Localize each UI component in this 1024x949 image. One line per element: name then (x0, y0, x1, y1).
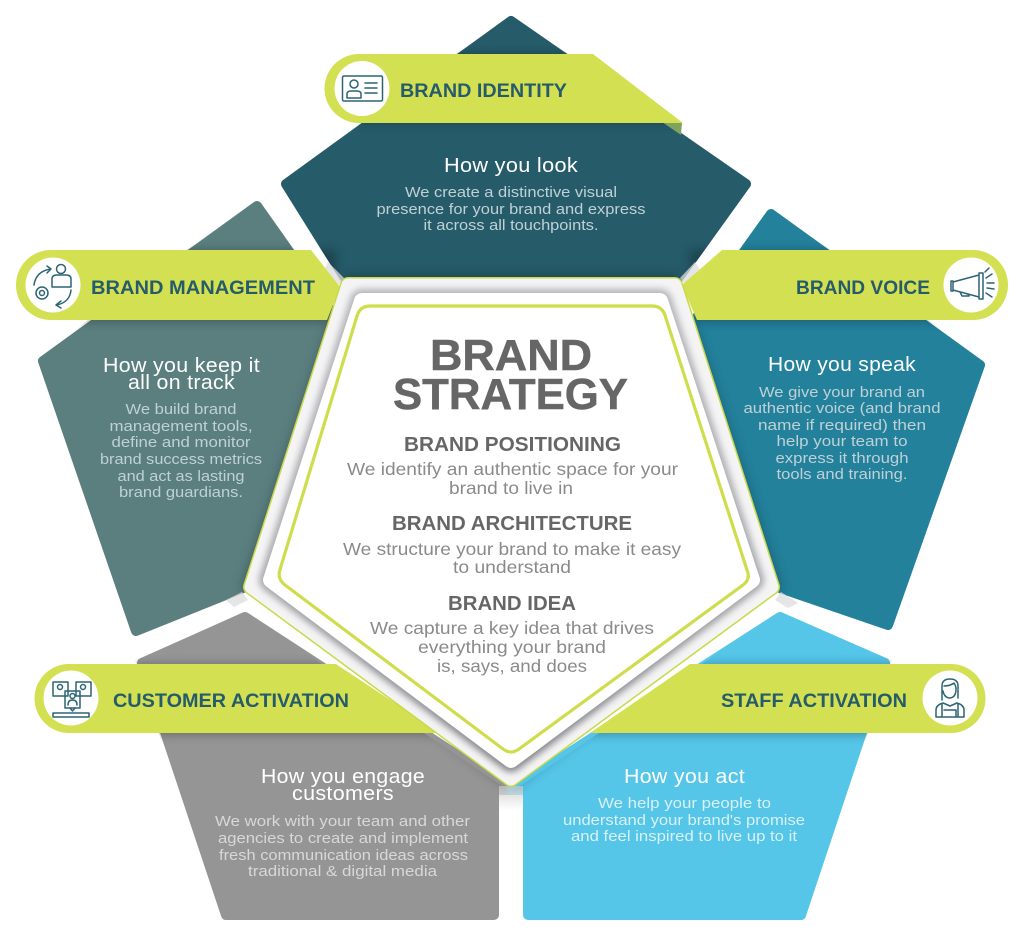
text: brand idea: is, says, and does (437, 656, 587, 676)
text: voice description: We give your brand an (759, 384, 925, 401)
text: brand positioning (347, 434, 678, 498)
text: management description: brand success metrics (100, 451, 262, 468)
text: brand idea: BRAND IDEA (448, 593, 576, 615)
ribbon: customer activation (34, 664, 440, 733)
panel: customer activation (142, 617, 511, 915)
text: voice description: express it through (776, 450, 908, 467)
title: brand strategy: STRATEGY (393, 370, 628, 419)
text: management description (100, 401, 262, 501)
heading: how you keep it all on track: How you keep it (103, 355, 260, 377)
text: voice description: help your team to (776, 433, 908, 450)
text: brand idea (370, 593, 654, 676)
icon: management cycle (26, 258, 80, 312)
label: brand management: BRAND MANAGEMENT (91, 278, 315, 299)
title: brand strategy (393, 331, 628, 419)
ribbon: brand identity (324, 54, 683, 135)
text: voice description (744, 384, 940, 483)
panel: staff activation (511, 617, 885, 915)
inner green outline (279, 306, 748, 752)
text: identity description: it across all touchpoints. (424, 217, 598, 234)
text: brand idea: everything your brand (418, 637, 606, 657)
text: voice description: name if required) then (758, 417, 926, 434)
text: brand architecture (343, 513, 681, 577)
ribbon: brand management (16, 250, 340, 320)
text: staff description: and feel inspired to live up to it (571, 828, 798, 845)
label: staff activation: STAFF ACTIVATION (721, 691, 907, 712)
text: identity description (376, 184, 646, 234)
text: management description: define and monitor (112, 434, 251, 451)
panel: brand strategy centre (251, 285, 772, 779)
heading: how you engage customers: customers (292, 783, 394, 805)
label: customer activation: CUSTOMER ACTIVATION (113, 691, 349, 712)
panel: brand identity (286, 21, 746, 280)
text: staff description: understand your brand's promise (563, 812, 805, 829)
heading: how you act: How you act (624, 766, 745, 788)
heading: how you keep it all on track (103, 355, 260, 394)
panel: brand management (43, 206, 334, 631)
text: staff description (563, 795, 805, 845)
icon: staff person (922, 670, 978, 726)
text: brand positioning: BRAND POSITIONING (404, 434, 621, 456)
text: brand positioning: brand to live in (449, 478, 573, 498)
text: customer description (215, 813, 470, 880)
text: brand architecture: to understand (453, 557, 571, 577)
label: brand identity: BRAND IDENTITY (400, 81, 567, 102)
text: brand architecture: BRAND ARCHITECTURE (392, 513, 632, 535)
heading: how you speak: How you speak (768, 354, 917, 376)
text: management description: We build brand (126, 401, 236, 418)
text: customer description: We work with your team and other (215, 813, 470, 830)
text: customer description: traditional & digital media (248, 863, 438, 880)
text: management description: and act as lasting (118, 468, 244, 485)
text: staff description: We help your people to (598, 795, 771, 812)
text: brand architecture: We structure your brand to make it easy (343, 539, 681, 559)
text: identity description: presence for your brand and express (376, 201, 646, 218)
icon: customer panels (44, 670, 98, 726)
ribbon: brand voice (682, 250, 1008, 320)
panel: brand voice (695, 214, 980, 625)
icon: megaphone (944, 258, 998, 312)
text: identity description: We create a distinctive visual (405, 184, 617, 201)
text: voice description: tools and training. (776, 466, 908, 483)
text: brand positioning: We identify an authentic space for your (347, 459, 678, 479)
title: brand strategy: BRAND (430, 331, 592, 380)
text: management description: brand guardians. (119, 484, 243, 501)
text: customer description: agencies to create and implement (218, 830, 469, 847)
text: brand idea: We capture a key idea that drives (370, 618, 654, 638)
heading: how you look: How you look (444, 155, 579, 177)
ribbon: staff activation (590, 664, 986, 733)
text: management description: management tools, (110, 418, 252, 435)
heading: how you engage customers: How you engage (261, 766, 425, 788)
text: customer description: fresh communication ideas across (219, 847, 468, 864)
icon: id card (334, 61, 390, 116)
heading: how you keep it all on track: all on track (128, 372, 236, 394)
label: brand voice: BRAND VOICE (796, 278, 930, 299)
heading: how you engage customers (261, 766, 425, 805)
text: voice description: authentic voice (and brand (744, 400, 940, 417)
